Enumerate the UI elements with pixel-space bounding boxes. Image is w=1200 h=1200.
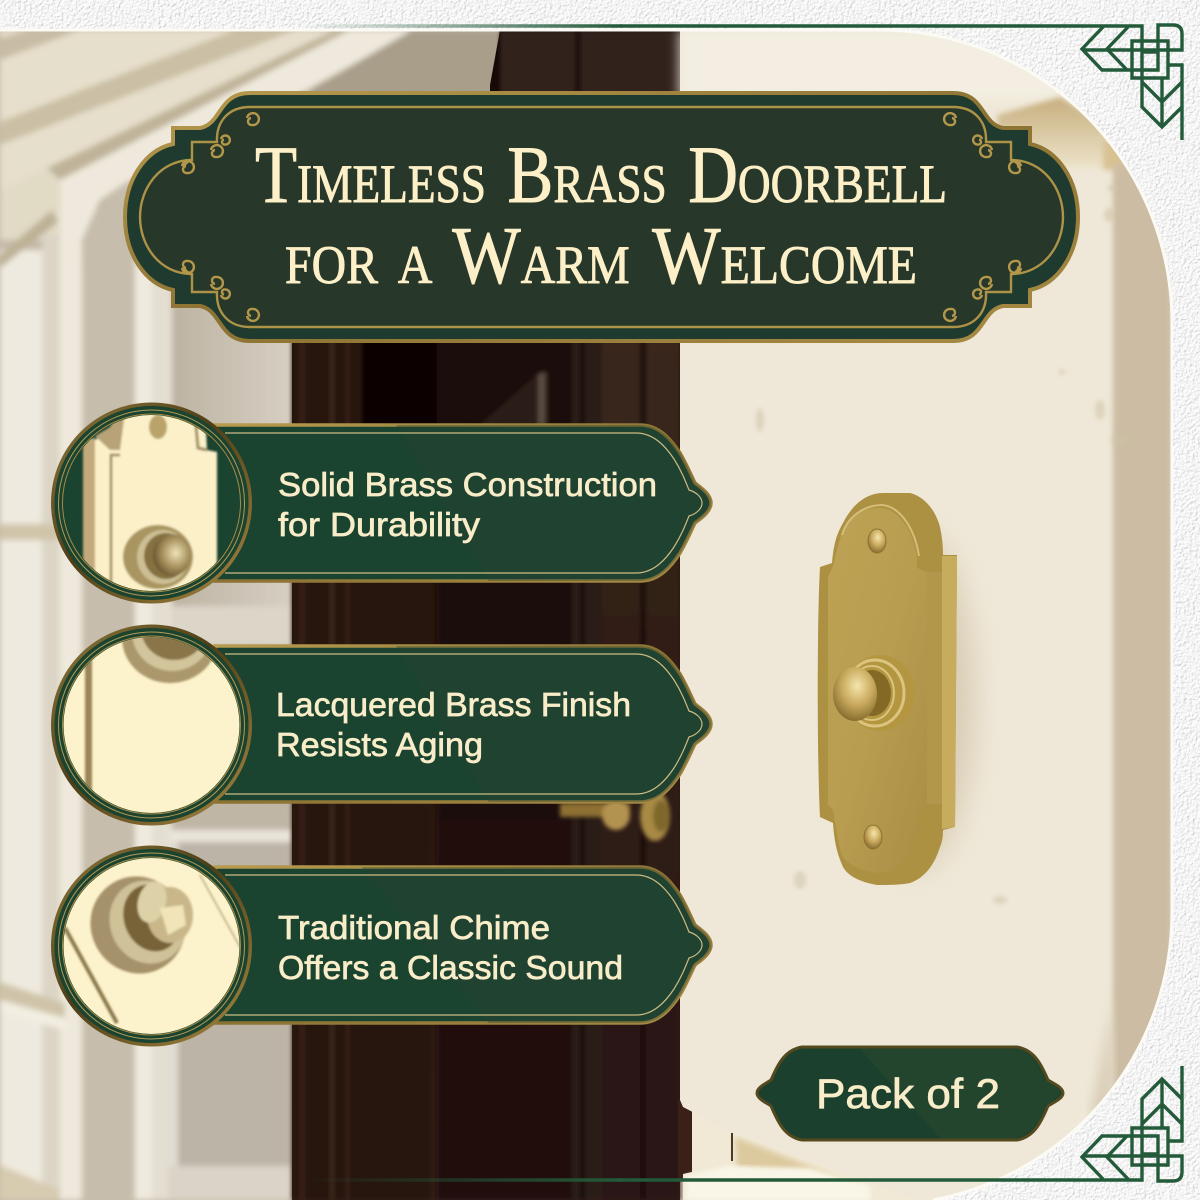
plate outer edge: [818, 493, 957, 885]
badge label: Pack of 2: [816, 1070, 1000, 1117]
area below wall block: [683, 1110, 930, 1200]
feature text: Traditional Chime: [278, 909, 550, 946]
corner flourish bottom right: [944, 261, 1021, 321]
feature 1: solid brass: [51, 402, 720, 604]
feature 3: traditional chime: [51, 846, 720, 1046]
feature 2: lacquered finish: [51, 624, 713, 826]
door edge beside wall base: [678, 1100, 692, 1178]
screw top: [868, 529, 886, 553]
corner flourish top left: [182, 113, 259, 173]
corner flourish bottom left: [182, 261, 259, 321]
badge: pack of 2: [757, 1047, 1063, 1140]
badge shape: [757, 1047, 1063, 1140]
button knob: [833, 667, 877, 721]
feature text: Solid Brass Construction: [278, 466, 657, 503]
feature text: Resists Aging: [276, 726, 483, 763]
plaque inner panel: [140, 107, 1063, 327]
door handle: [560, 791, 670, 841]
badge lighter panel: [860, 1049, 1060, 1138]
lens: button close-up: [51, 846, 252, 1046]
lens: lacquered surface close-up: [51, 624, 252, 826]
lens: plate and button close-up: [51, 402, 252, 604]
title line 2: FOR A WARM WELCOME: [285, 210, 917, 301]
feature text: Lacquered Brass Finish: [276, 686, 631, 723]
title line 1: TIMELESS BRASS DOORBELL: [255, 129, 947, 220]
button base: [845, 655, 915, 731]
ribbon: [215, 644, 720, 804]
decorative frame corner: bottom right: [300, 1066, 1182, 1181]
feature text: Offers a Classic Sound: [278, 949, 623, 986]
wall block: [680, 30, 1172, 1200]
screw bottom: [864, 825, 882, 849]
product: brass doorbell plate: [818, 493, 975, 885]
plaque shape: [125, 93, 1078, 341]
ribbon: [215, 865, 720, 1025]
feature text: for Durability: [278, 506, 481, 543]
plate thickness highlight: [942, 556, 957, 829]
ribbon: [215, 423, 720, 583]
decorative frame corner: top right: [300, 25, 1182, 140]
corner flourish top right: [944, 113, 1021, 173]
plate front face: [828, 508, 927, 873]
title plaque: [125, 93, 1078, 341]
